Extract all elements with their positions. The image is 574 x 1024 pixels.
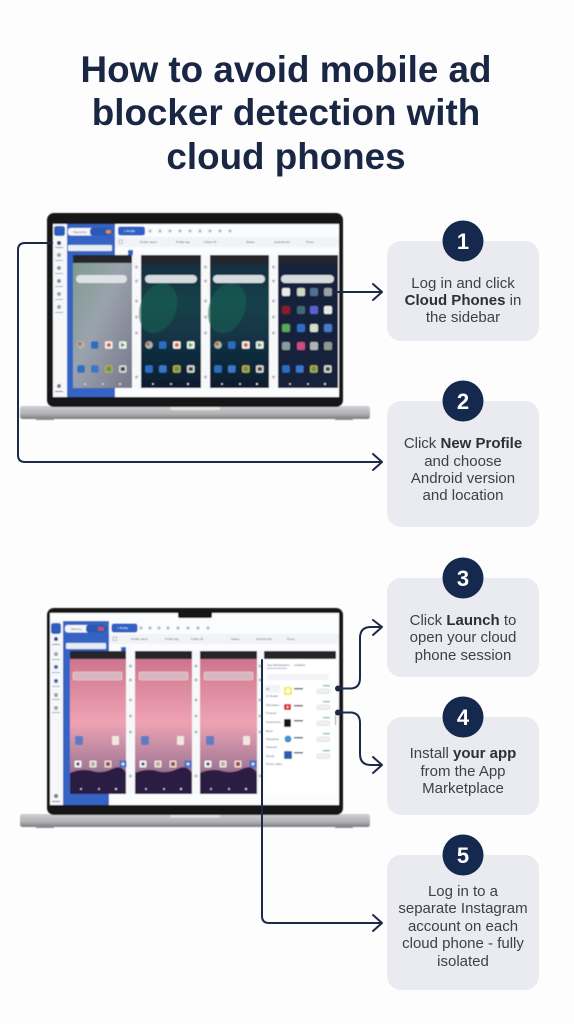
toolbar and table header: Proxy — [306, 240, 314, 244]
app marketplace panel: Photo Video — [266, 762, 283, 766]
blue profile panel — [67, 224, 115, 397]
app marketplace panel: Education — [266, 703, 280, 707]
toolbar and table header: Profile tag — [176, 240, 190, 244]
title — [81, 49, 491, 177]
toolbar and table header: Profile name — [140, 240, 157, 244]
step 5 — [387, 834, 539, 990]
step 2 — [387, 380, 539, 527]
app marketplace panel: Installed — [294, 663, 306, 667]
phone toolbars — [132, 255, 339, 388]
laptop: cloud phones list — [20, 213, 370, 420]
step 5 card — [387, 855, 539, 990]
step 2 text: and location — [423, 487, 503, 504]
app marketplace panel: Network — [266, 745, 278, 749]
app marketplace panel: Social — [266, 754, 275, 758]
toolbar and table header: Android info — [256, 637, 272, 641]
laptop bezel — [47, 608, 343, 815]
step 4 — [387, 696, 539, 815]
toolbar and table header: Profile name — [131, 637, 148, 641]
app marketplace panel: Book — [266, 729, 273, 733]
step 4 card — [387, 717, 539, 815]
laptop base — [20, 406, 370, 420]
step 5 text: cloud phone - fully — [402, 935, 524, 952]
toolbar and table header: Profile tag — [165, 637, 179, 641]
arrow: launch to step 3 — [335, 620, 382, 692]
toolbar and table header: Status — [246, 240, 255, 244]
phone 4 with app grid — [278, 255, 338, 388]
step 1 card — [387, 241, 539, 341]
step 3 text: open your cloud — [410, 629, 516, 646]
title: blocker detection with — [92, 92, 480, 133]
step 1 text: Log in and click — [411, 275, 515, 292]
step 1 text: Cloud Phones in — [405, 292, 521, 309]
app screen — [50, 613, 339, 805]
step 2 text: Android version — [411, 470, 515, 487]
step 1 text: the sidebar — [426, 309, 500, 326]
arrow: phones to step 5 — [262, 660, 382, 931]
laptop bezel — [47, 213, 343, 407]
app marketplace panel: All — [266, 687, 270, 691]
step 2 card — [387, 401, 539, 527]
step 3 card — [387, 578, 539, 677]
blue profile panel — [63, 621, 109, 805]
arrow: app marketplace to step 4 — [335, 710, 382, 773]
phone 2 — [132, 255, 201, 388]
phone 1 — [73, 255, 132, 388]
step 3 badge — [442, 558, 484, 598]
step 5 text: account on each — [408, 918, 518, 935]
title: cloud phones — [166, 136, 406, 177]
step 3 text: Click Launch to — [410, 612, 516, 629]
step 1 badge: 1 — [457, 229, 469, 254]
phone 2 pink — [135, 651, 192, 794]
app marketplace panel — [264, 651, 336, 794]
toolbar and table header — [109, 624, 339, 651]
step 3 text: phone session — [415, 647, 511, 664]
step 1 — [387, 220, 539, 341]
camera notch — [178, 608, 212, 618]
step 1 badge — [442, 220, 484, 262]
toolbar and table header: + Profile — [117, 626, 128, 630]
app sidebar — [50, 621, 63, 805]
app screen — [53, 224, 339, 397]
toolbar and table header: Proxy — [287, 637, 295, 641]
blue profile panel: Memory — [71, 627, 82, 631]
step 5 badge — [442, 834, 484, 876]
step 2 text: Click New Profile — [404, 435, 522, 452]
toolbar and table header: + Profile — [124, 229, 135, 233]
step 3 — [387, 558, 539, 677]
step 5 badge: 5 — [457, 843, 469, 868]
step 4 text: Install your app — [410, 745, 516, 762]
arrow: cloud phones to step 1 — [333, 284, 382, 300]
title: How to avoid mobile ad — [81, 49, 491, 90]
blue profile panel: Segments — [73, 230, 87, 234]
toolbar and table header: Folder ID — [204, 240, 217, 244]
step 4 badge: 4 — [457, 705, 470, 730]
phone 1 pink — [70, 651, 126, 794]
toolbar and table header: Android info — [274, 240, 290, 244]
step 3 badge: 3 — [457, 566, 469, 591]
phone 3 pink — [200, 651, 257, 794]
phone toolbars — [126, 651, 264, 794]
step 4 text: from the App — [420, 763, 506, 780]
step 4 badge — [442, 696, 484, 738]
step 2 badge: 2 — [457, 389, 469, 414]
arrow: sidebar to step 2 — [18, 243, 382, 470]
step 5 text: isolated — [437, 953, 489, 970]
toolbar and table header — [115, 226, 339, 255]
app marketplace panel: Investment — [266, 720, 281, 724]
app sidebar — [53, 224, 67, 397]
toolbar and table header: Status — [231, 637, 240, 641]
app marketplace panel: Finance — [266, 711, 277, 715]
toolbar and table header: Folder ID — [191, 637, 204, 641]
step 5 text: Log in to a — [428, 883, 499, 900]
app marketplace panel: AI Model — [266, 694, 278, 698]
app marketplace panel: App Marketplace — [267, 663, 290, 667]
step 5 text: separate Instagram — [398, 900, 528, 917]
phone 3 — [201, 255, 269, 388]
laptop: app marketplace — [20, 608, 370, 828]
app marketplace panel: Shopping — [266, 737, 279, 741]
step 4 text: Marketplace — [422, 780, 504, 797]
laptop base — [20, 814, 370, 828]
step 2 badge — [442, 380, 484, 422]
step 2 text: and choose — [424, 453, 502, 470]
